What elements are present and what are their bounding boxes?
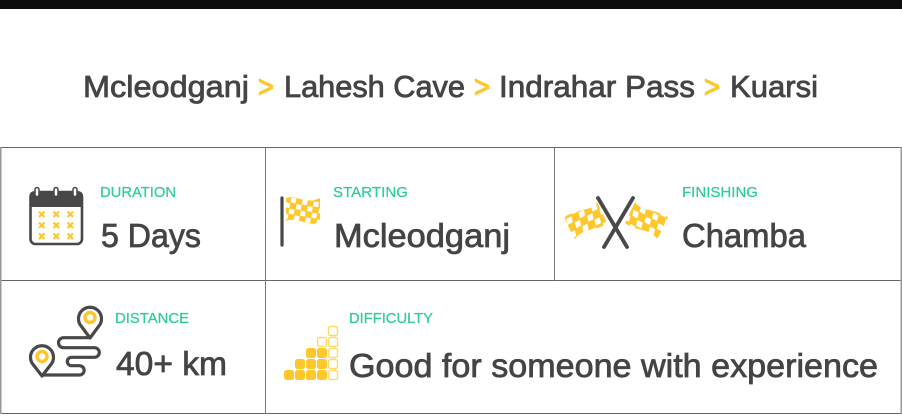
icon: difficulty level blocks <box>284 326 338 380</box>
icon: route with map pins <box>30 307 101 376</box>
value: chamba: Chamba <box>682 217 807 254</box>
label: duration: DURATION <box>100 184 176 201</box>
panel: finishing <box>564 184 807 254</box>
title: route: Kuarsi <box>730 69 818 104</box>
value: mcleodganj: Mcleodganj <box>334 217 510 254</box>
value: good for someone with experience: Good for someone with experience <box>349 347 878 384</box>
panel: duration <box>30 184 201 254</box>
value: 40+ km: 40+ km <box>116 345 227 382</box>
title: route: Mcleodganj <box>83 69 249 104</box>
title: route: Lahesh Cave <box>284 69 465 104</box>
icon: start flag <box>282 197 320 245</box>
label: finishing: FINISHING <box>682 184 758 201</box>
panel: distance <box>30 307 227 382</box>
icon: calendar <box>30 188 83 244</box>
icon: crossed finish flags <box>564 198 668 247</box>
panel: difficulty <box>284 310 878 384</box>
label: difficulty: DIFFICULTY <box>349 310 433 327</box>
title: route: > <box>258 69 274 104</box>
title: route <box>83 69 818 104</box>
title: route: > <box>704 69 720 104</box>
info table grid <box>0 147 902 414</box>
panel: starting <box>282 184 510 254</box>
top black bar <box>0 0 902 9</box>
label: distance: DISTANCE <box>115 310 189 327</box>
label: starting: STARTING <box>333 184 408 201</box>
title: route: Indrahar Pass <box>499 69 695 104</box>
value: 5 days: 5 Days <box>101 217 201 254</box>
title: route: > <box>474 69 490 104</box>
